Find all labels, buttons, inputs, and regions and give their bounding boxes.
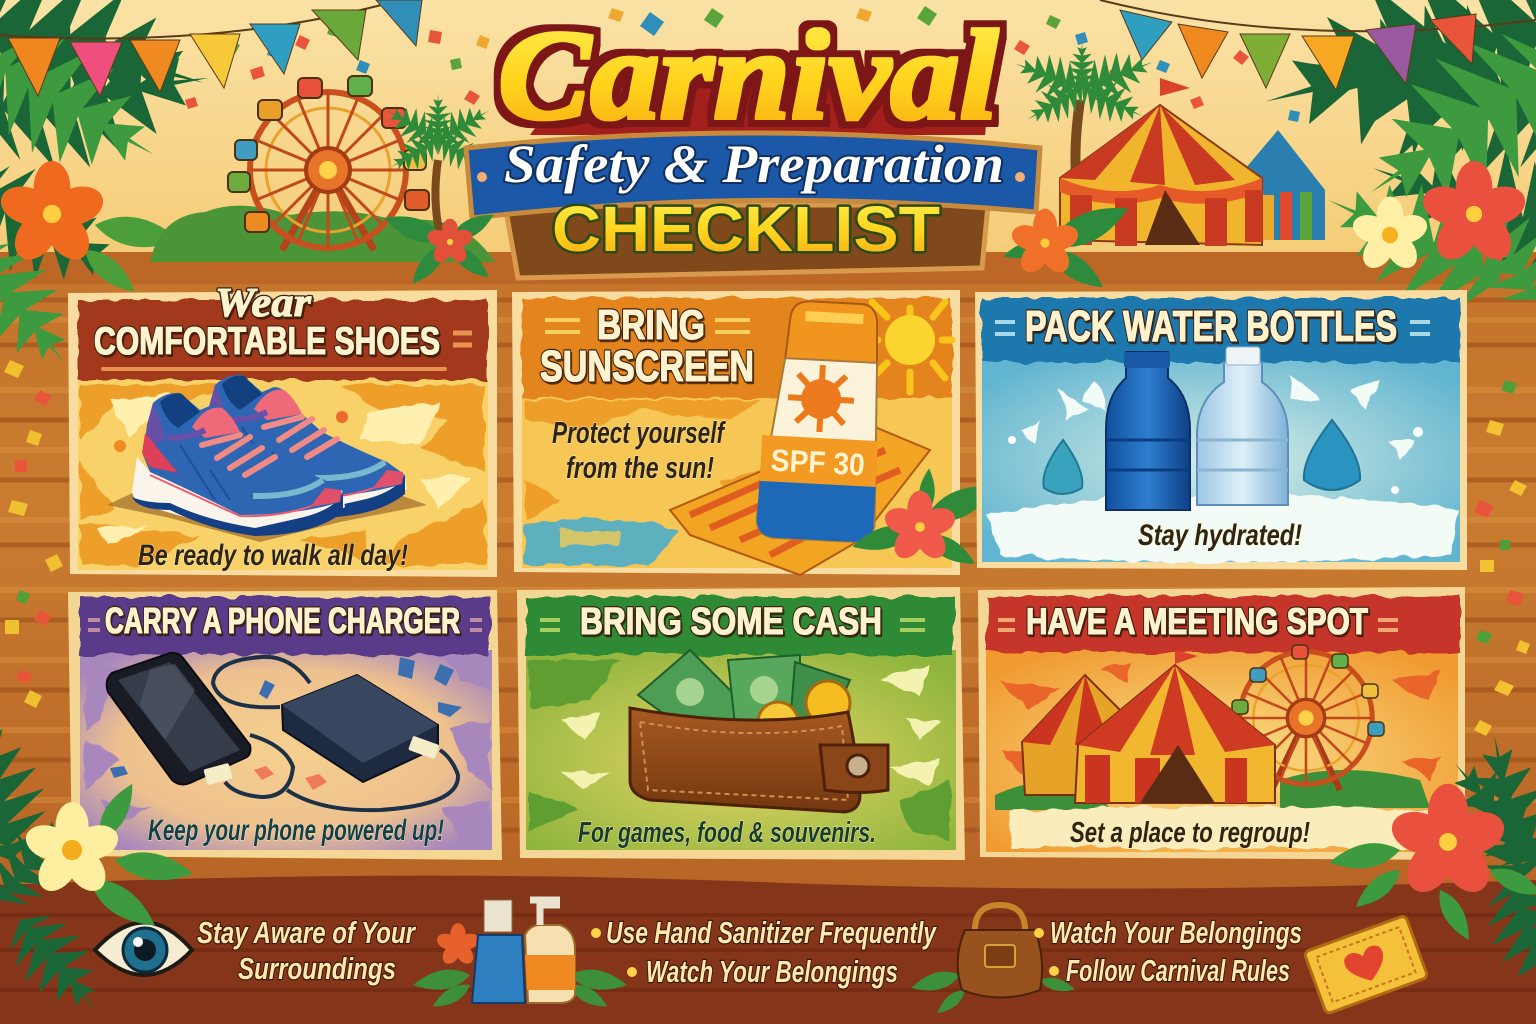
text: protect yourself <box>552 415 726 485</box>
bunting left <box>0 0 422 96</box>
icon: orange hibiscus <box>0 161 108 268</box>
text: protect yourself: Protect yourself <box>552 415 726 450</box>
icon: brown wallet <box>630 708 888 812</box>
wood sign backing <box>505 205 988 278</box>
heading: Wear <box>215 279 312 325</box>
text: belongings and rules <box>1034 915 1302 988</box>
icon: tents <box>1022 650 1275 803</box>
heading: PACK WATER BOTTLES <box>1025 302 1397 351</box>
flower cluster right of sign <box>1001 195 1134 296</box>
side confetti <box>4 360 1530 736</box>
panel: have a meeting spot <box>978 587 1465 860</box>
icon: hibiscus and leaves <box>850 468 1002 572</box>
Safety & Preparation subtitle: Safety & Preparation <box>504 134 1004 194</box>
text: belongings and rules: Follow Carnival Rules <box>1066 953 1290 988</box>
caption: Keep your phone powered up! <box>148 814 444 847</box>
top-right palm foliage <box>1240 0 1536 334</box>
icon: power bank <box>282 675 440 782</box>
bottom banner <box>0 876 1536 1024</box>
text: belongings and rules: Watch Your Belongings <box>1050 915 1302 950</box>
icon: left droplet <box>1043 440 1082 494</box>
icon: red hibiscus <box>1386 784 1510 901</box>
text: sanitizer and belongings <box>591 915 937 989</box>
heading: SUNSCREEN <box>540 342 754 391</box>
panel: bring some cash <box>517 587 965 860</box>
caption: For games, food & souvenirs. <box>578 817 876 849</box>
icon: sunscreen bottle <box>756 299 886 543</box>
icon: sanitizer bottles <box>412 900 628 1013</box>
icon: yellow plumeria <box>1349 197 1431 274</box>
heading: BRING <box>597 301 705 348</box>
sky confetti <box>185 6 1300 122</box>
heading: COMFORTABLE SHOES <box>94 320 440 363</box>
text: stay aware: Stay Aware of Your <box>197 915 416 950</box>
heading: BRING SOME CASH <box>580 601 882 643</box>
icon: brown bag <box>909 905 1076 1018</box>
icon: sunscreen bottle: SPF 30 <box>770 443 866 482</box>
Carnival wordmark: Carnival <box>498 4 998 146</box>
text: sanitizer and belongings: Watch Your Belongings <box>646 954 898 989</box>
panel: wear comfortable shoes <box>68 279 497 577</box>
illustration: small palm left <box>378 94 498 235</box>
text: protect yourself: from the sun! <box>566 450 714 485</box>
text: stay aware: Surroundings <box>238 951 396 986</box>
text: sanitizer and belongings: Use Hand Sanitizer Frequently <box>606 915 937 950</box>
illustration: ferris wheel <box>228 76 429 250</box>
bottom-right foliage <box>1327 727 1536 1012</box>
heading <box>540 301 754 391</box>
icon: blue bottle <box>1106 352 1190 510</box>
icon: clear bottle <box>1197 347 1288 505</box>
icon: ticket <box>1304 915 1428 1014</box>
illustration: circus tent <box>1060 78 1325 246</box>
icon: right droplet <box>1304 420 1360 490</box>
heading: HAVE A MEETING SPOT <box>1026 601 1368 642</box>
icon: charging cables <box>213 657 458 810</box>
caption: Stay hydrated! <box>1138 519 1302 552</box>
top-left palm foliage <box>0 0 223 392</box>
icon: cash and coins <box>638 650 850 742</box>
blue banner <box>466 133 1040 218</box>
bunting right <box>1100 0 1536 90</box>
icon: sun <box>860 302 952 392</box>
confetti shapes <box>110 657 462 790</box>
icon: sneakers <box>107 375 427 542</box>
heading: CARRY A PHONE CHARGER <box>105 600 460 641</box>
heading <box>94 279 440 363</box>
Carnival backing <box>530 80 986 135</box>
icon: striped towel <box>670 425 930 575</box>
bushes behind wheel <box>150 206 495 262</box>
icon: phone <box>107 653 250 785</box>
icon: ferris wheel small <box>1232 645 1384 790</box>
illustration: palm right <box>1007 40 1161 210</box>
text: stay aware <box>197 915 416 986</box>
title sign <box>466 4 1040 278</box>
panel: bring sunscreen <box>512 290 1002 575</box>
icon: plumeria <box>21 802 123 898</box>
panel: carry a phone charger <box>68 590 502 860</box>
caption: Set a place to regroup! <box>1070 817 1310 849</box>
icon: red hibiscus <box>1418 161 1530 268</box>
panel: pack water bottles <box>975 290 1467 570</box>
CHECKLIST heading: CHECKLIST <box>552 193 940 265</box>
icon: eye <box>95 922 192 975</box>
flower cluster left of sign <box>380 208 498 289</box>
bottom-left foliage <box>0 707 195 1024</box>
caption: Be ready to walk all day! <box>138 539 408 572</box>
